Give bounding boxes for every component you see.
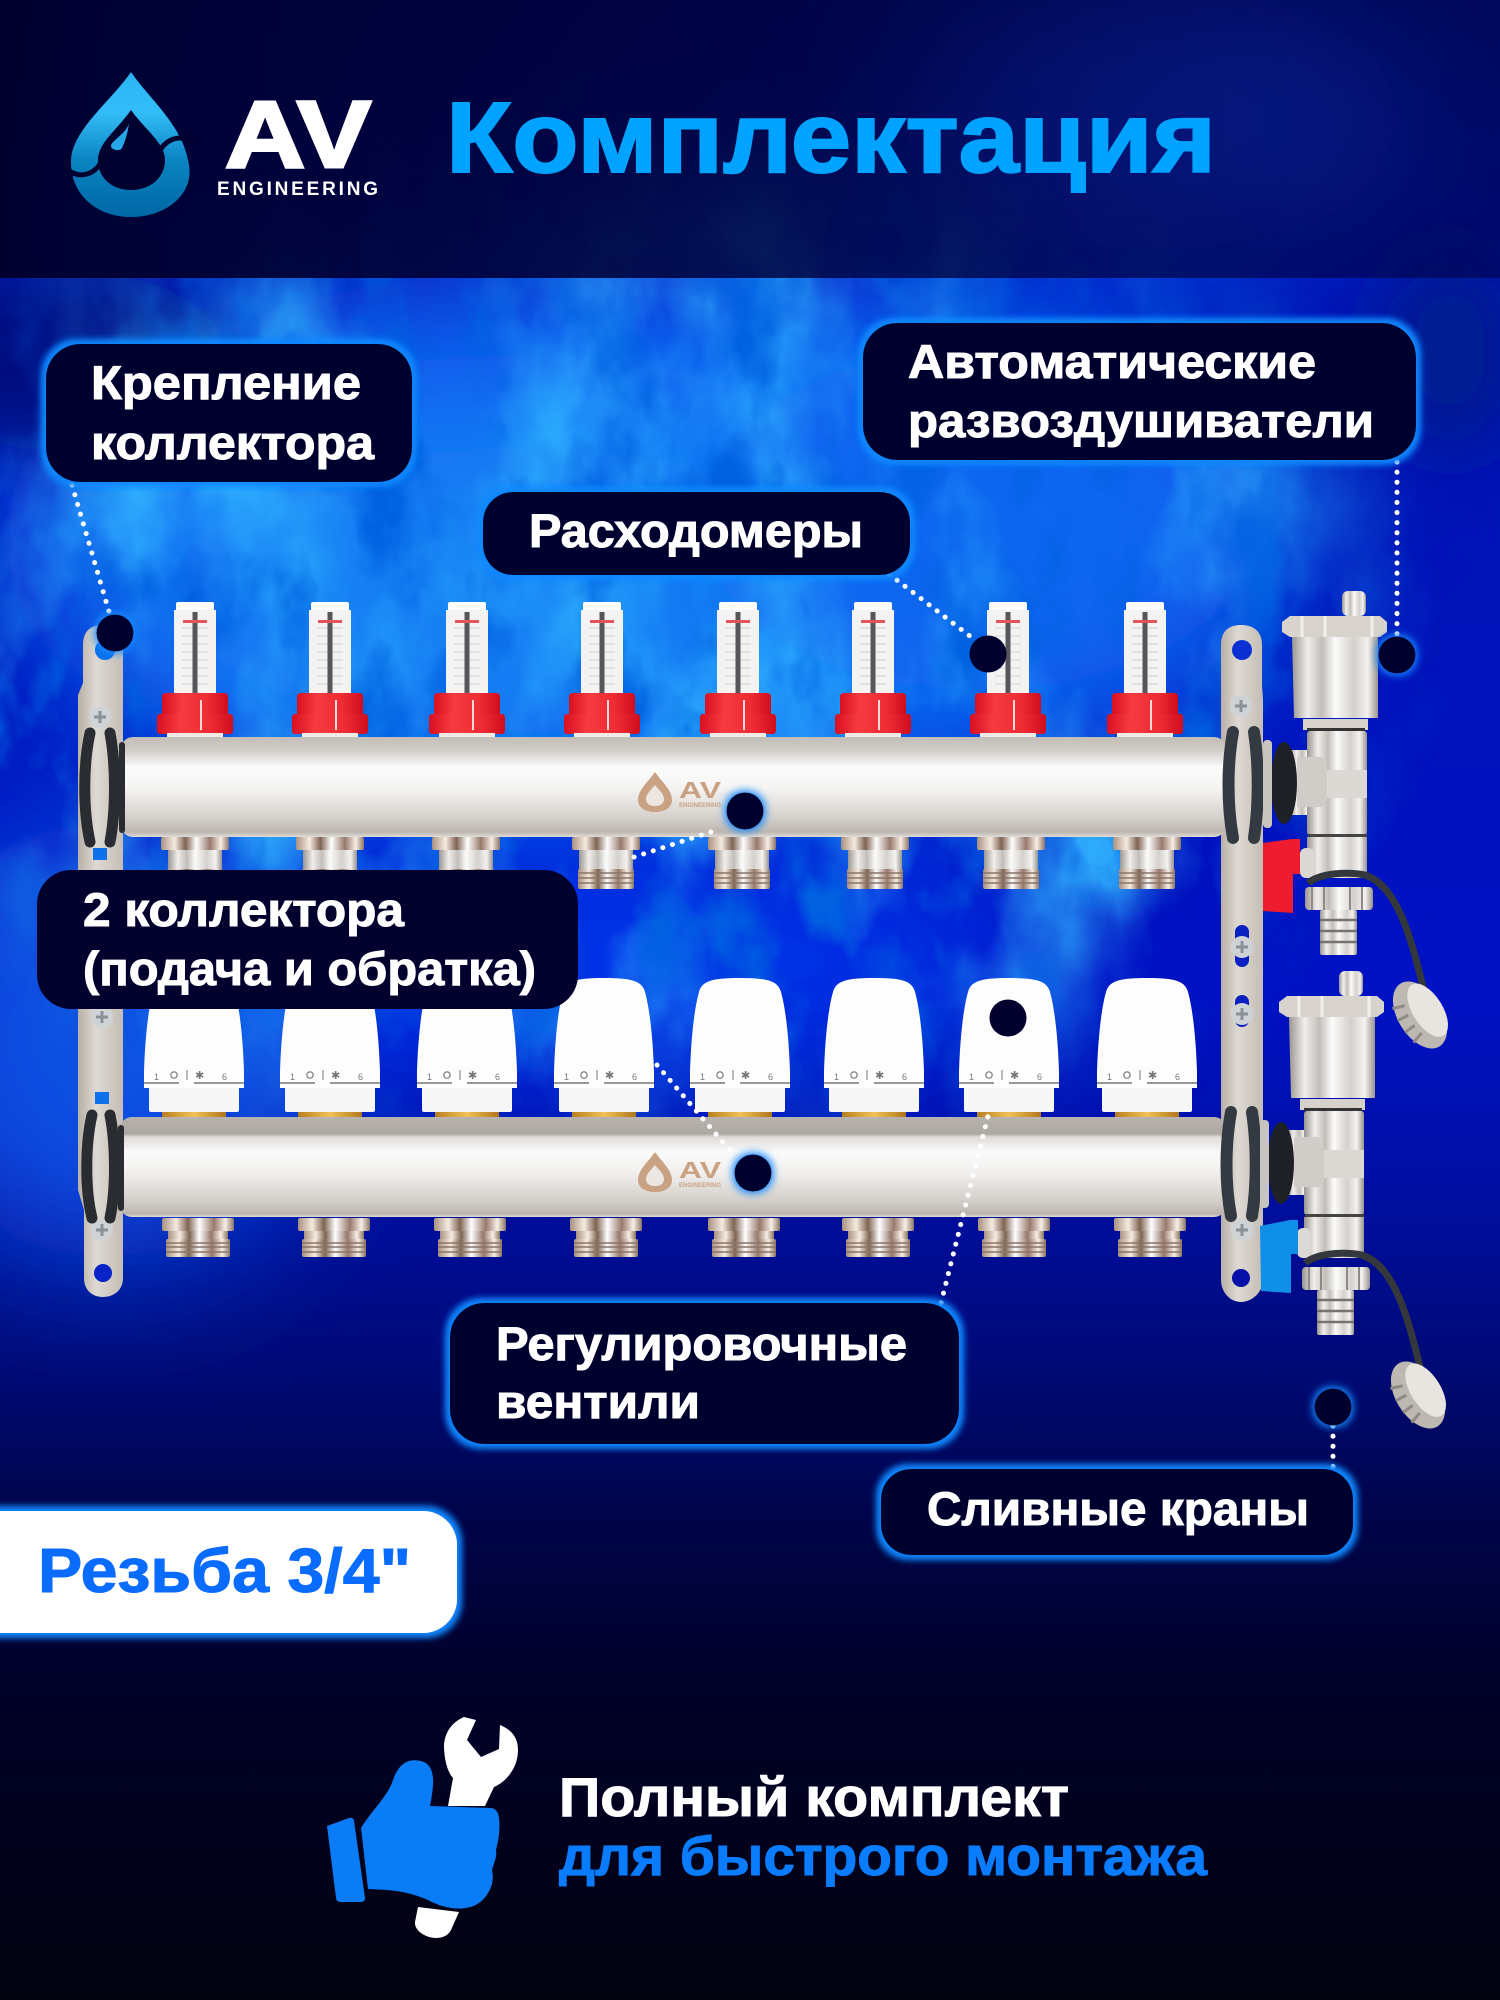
flowmeters — [157, 602, 1183, 744]
thermostatic valve caps — [144, 978, 1197, 1120]
icon: thumbs-up with wrench — [327, 1717, 518, 1938]
logo: AV Engineering — [68, 72, 378, 217]
callout: Крепление коллектора — [46, 344, 412, 482]
callout: Резьба 3/4: Резьба 3/4" — [38, 1537, 411, 1606]
bottom caption — [559, 1766, 1207, 1887]
outlet fittings: bottom manifold — [162, 1218, 1186, 1257]
callout: Сливные краны — [881, 1469, 1353, 1555]
pipe logo: top — [638, 772, 722, 812]
blue drain handle — [1260, 1220, 1298, 1293]
header band — [0, 0, 1500, 278]
outlet fittings: top manifold — [161, 837, 1181, 889]
callout: 2 коллектора — [37, 870, 578, 1009]
title: Комплектация — [446, 82, 1216, 194]
pipe clamps — [85, 732, 1258, 1218]
wrench lower — [415, 1907, 459, 1938]
drain cap on chain — [1380, 1351, 1458, 1438]
marker dots — [96, 614, 1416, 1426]
callout: Регулировочные вентили: вентили — [496, 1375, 700, 1428]
bottom caption: Полный комплект — [559, 1766, 1069, 1828]
air vent and drain assembly: bottom — [1260, 971, 1458, 1438]
thumb cuff — [327, 1818, 365, 1902]
bottom caption: для быстрого монтажа — [559, 1825, 1207, 1887]
callout: 2 коллектора: (подача и обратка) — [83, 942, 536, 995]
callout: Регулировочные вентили — [450, 1303, 959, 1444]
left mounting bracket — [78, 625, 123, 1297]
bottom manifold pipe — [120, 1117, 1226, 1217]
logo subtitle: ENGINEERING — [217, 179, 378, 200]
product: manifold assembly — [78, 591, 1460, 1438]
dotted leader lines — [72, 462, 1397, 1469]
callout: Резьба 3/4 — [0, 1511, 457, 1633]
air vent and drain assembly: top — [1263, 591, 1460, 1058]
drain cap on chain — [1382, 971, 1460, 1058]
callout: Регулировочные вентили: Регулировочные — [496, 1317, 907, 1370]
icon: water drop — [68, 72, 193, 217]
pipe logo: bottom — [638, 1152, 722, 1192]
callout: Автоматические развоздушиватели — [863, 323, 1416, 460]
logo wordmark: AV — [225, 82, 371, 188]
callout: Крепление коллектора: Крепление — [91, 356, 361, 409]
callout: 2 коллектора: 2 коллектора — [83, 883, 405, 936]
callout: Расходомеры — [483, 492, 910, 575]
wrench upper — [444, 1717, 518, 1806]
thumb fist — [361, 1760, 499, 1909]
callout: Автоматические развоздушиватели: развоздушиватели — [908, 394, 1374, 447]
red drain handle — [1263, 839, 1300, 913]
callout: Крепление коллектора: коллектора — [91, 416, 375, 469]
callout: Автоматические развоздушиватели: Автоматические — [908, 335, 1316, 388]
callout: Сливные краны: Сливные краны — [927, 1482, 1309, 1535]
right mounting bracket — [1221, 625, 1263, 1302]
callout: Расходомеры: Расходомеры — [529, 504, 863, 557]
top manifold pipe — [121, 737, 1226, 837]
